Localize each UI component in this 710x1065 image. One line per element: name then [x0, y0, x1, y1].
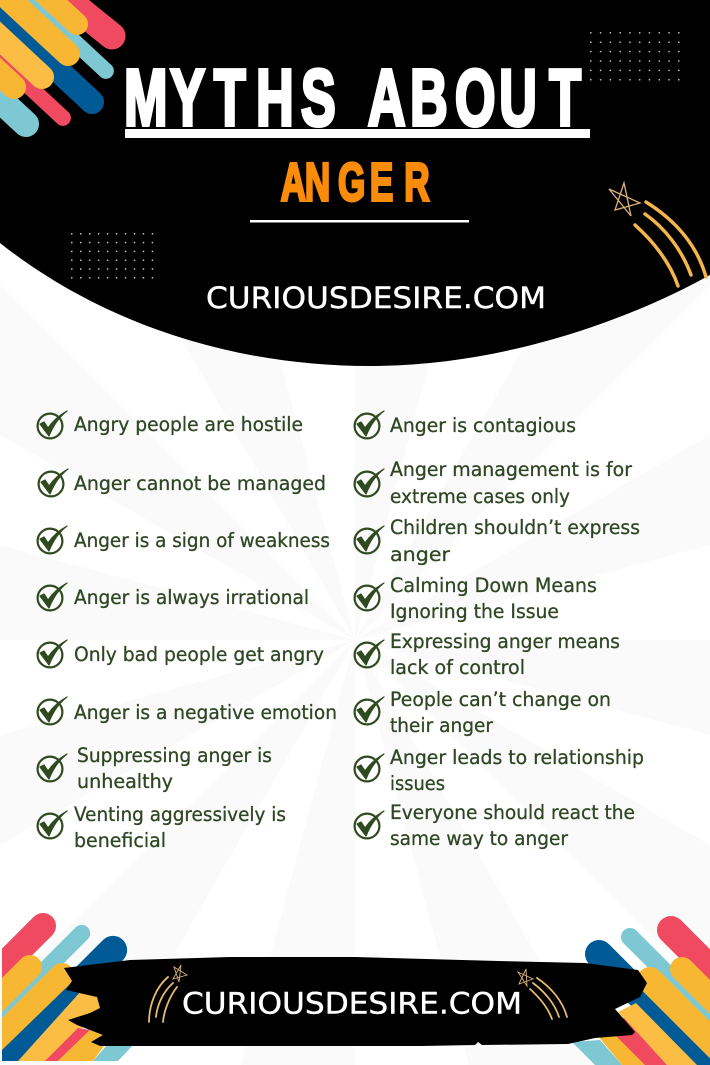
- myth: lack of control: Expressing anger means: [390, 630, 620, 653]
- myth: extreme cases: extreme cases only: [390, 485, 570, 508]
- myth: venting: beneficial: [74, 829, 166, 852]
- myth: same way: same way to anger: [390, 827, 569, 850]
- myth: relationship issues: issues: [390, 772, 445, 795]
- myth: contagious: [355, 411, 576, 438]
- myth: children: [355, 516, 640, 566]
- header black curved panel: [0, 0, 710, 366]
- myth: relationship issues: [355, 746, 644, 795]
- myth: venting: [38, 803, 286, 852]
- myth: hostile: Angry people are hostile: [74, 413, 303, 436]
- myth: same way: Everyone should react the: [390, 801, 635, 824]
- website label: header: CURIOUSDESIRE.COM: [206, 281, 546, 315]
- decorative dot grid: top right: [590, 32, 680, 81]
- decorative colour stripes: bottom left: [2, 913, 134, 1061]
- icon: shooting star footer left: [149, 965, 187, 1022]
- myth: children: Children shouldn’t express: [390, 516, 640, 539]
- list: right column myths: [355, 411, 644, 850]
- myth: cannot be managed: Anger cannot be managed: [74, 472, 326, 495]
- decorative dot grid: left: [71, 233, 154, 279]
- myth: same way: [355, 801, 635, 850]
- myth: irrational: Anger is always irrational: [74, 586, 309, 609]
- title: myths about: MYTHS ABOUT: [124, 54, 581, 143]
- myth: contagious: Anger is contagious: [390, 414, 576, 437]
- myth: people can't change: their anger: [390, 714, 494, 737]
- myth: suppressing anger: [38, 744, 272, 793]
- myth: calming down: Ignoring the Issue: [390, 600, 559, 623]
- myth: suppressing anger: Suppressing anger is: [77, 744, 272, 767]
- decorative colour stripes: bottom right: [572, 916, 710, 1065]
- title underline: [125, 129, 590, 138]
- subtitle rule: [250, 220, 469, 222]
- myth: extreme cases: [355, 458, 633, 508]
- myth: calming down: Calming Down Means: [390, 574, 597, 597]
- website label: footer: CURIOUSDESIRE.COM: [182, 986, 522, 1020]
- myth: lack of control: lack of control: [390, 656, 525, 679]
- myth: people can't change: [355, 688, 611, 737]
- footer black brush banner: [64, 957, 647, 1046]
- myth: extreme cases: Anger management is for: [390, 458, 633, 481]
- myth: venting: Venting aggressively is: [74, 803, 286, 826]
- myth: children: anger: [390, 543, 451, 566]
- myth: people can't change: People can’t change on: [390, 688, 611, 711]
- icon: shooting star footer right: [518, 969, 567, 1019]
- myth: calming down: [355, 574, 597, 623]
- myth: bad people: Only bad people get angry: [74, 643, 324, 666]
- list: left column myths: [38, 411, 337, 852]
- subtitle: anger: ANGER: [281, 152, 430, 212]
- myth: suppressing anger: unhealthy: [77, 770, 173, 793]
- icon: shooting star top right: [609, 183, 706, 286]
- myth: relationship issues: Anger leads to relationship: [390, 746, 644, 769]
- myth: sign of weakness: Anger is a sign of weakness: [74, 529, 330, 552]
- myth: lack of control: [355, 630, 620, 679]
- myth: negative emotion: Anger is a negative emotion: [74, 701, 337, 724]
- decorative colour stripes: top left: [0, 0, 126, 137]
